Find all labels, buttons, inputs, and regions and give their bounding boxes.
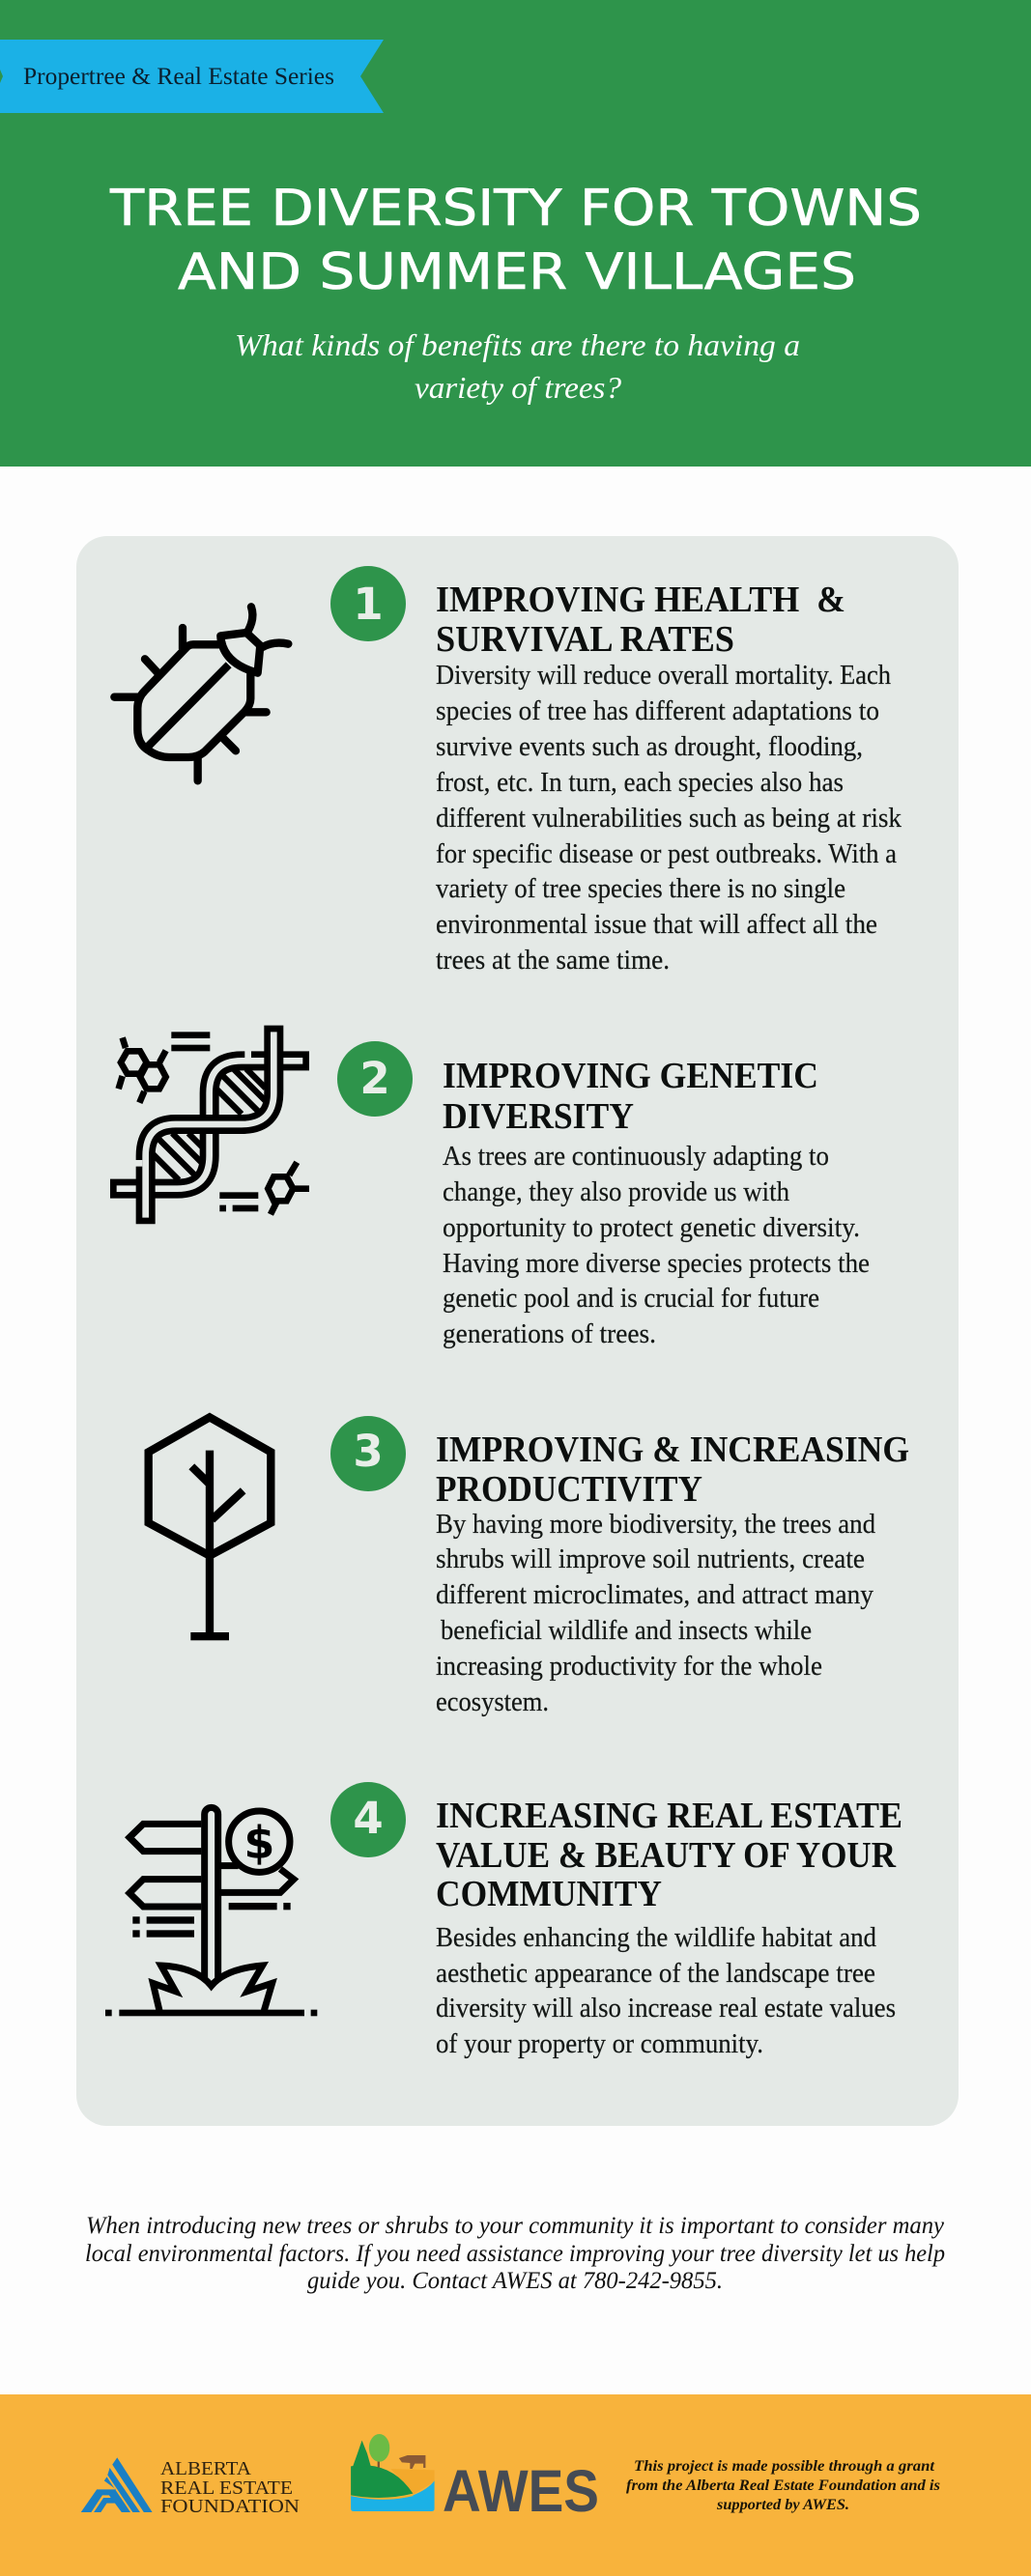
text block 2 bbox=[443, 1142, 870, 1349]
subtitle bbox=[235, 327, 800, 405]
closing note: When introducing new trees or shrubs to your community it is important to consider many bbox=[86, 2213, 945, 2239]
heading 1 bbox=[436, 580, 845, 660]
text block 4: diversity will also increase real estate values bbox=[436, 1994, 896, 2024]
sponsor note: supported by AWES. bbox=[716, 2497, 849, 2513]
closing note bbox=[85, 2213, 945, 2294]
subtitle: What kinds of benefits are there to having a bbox=[235, 327, 800, 362]
ribbon: series label: Propertree & Real Estate Series bbox=[23, 64, 334, 90]
text block 4: Besides enhancing the wildlife habitat and bbox=[436, 1923, 876, 1953]
closing note: local environmental factors. If you need assistance improving your tree diversity let us help bbox=[85, 2241, 945, 2267]
text block 1: environmental issue that will affect all the bbox=[436, 910, 877, 940]
icon: foundation mark bbox=[81, 2457, 153, 2512]
icon: dna bbox=[110, 1026, 309, 1224]
heading 4: COMMUNITY bbox=[436, 1874, 662, 1914]
number badge 4: 4 bbox=[353, 1793, 384, 1844]
item 2: improving genetic diversity bbox=[110, 1026, 870, 1349]
text block 4: aesthetic appearance of the landscape tree bbox=[436, 1959, 875, 1989]
footer band bbox=[0, 2394, 1031, 2576]
text block 3: increasing productivity for the whole bbox=[436, 1652, 822, 1682]
text block 1: different vulnerabilities such as being at risk bbox=[436, 804, 902, 834]
text block 1: for specific disease or pest outbreaks. With a bbox=[436, 839, 898, 869]
heading 1: IMPROVING HEALTH & bbox=[436, 580, 845, 620]
icon: beetle bbox=[114, 607, 288, 780]
text block 2: generations of trees. bbox=[443, 1319, 656, 1349]
number badge 3: 3 bbox=[353, 1426, 384, 1477]
text block 3: ecosystem. bbox=[436, 1687, 549, 1717]
title bbox=[109, 180, 922, 301]
text block 2: opportunity to protect genetic diversity. bbox=[443, 1213, 860, 1243]
number badge 2 bbox=[337, 1041, 413, 1117]
heading 4: VALUE & BEAUTY OF YOUR bbox=[436, 1835, 897, 1876]
icon: hexagon tree bbox=[149, 1417, 271, 1640]
subtitle: variety of trees? bbox=[415, 370, 621, 405]
AWES wordmark: AWES bbox=[443, 2458, 599, 2524]
text block 2: genetic pool and is crucial for future bbox=[443, 1284, 819, 1314]
sponsor note: from the Alberta Real Estate Foundation and is bbox=[626, 2477, 940, 2494]
sponsor note: This project is made possible through a grant bbox=[634, 2458, 935, 2475]
foundation wordmark: FOUNDATION bbox=[160, 2496, 300, 2517]
sponsor note bbox=[626, 2458, 940, 2513]
icon: AWES landscape bbox=[351, 2434, 435, 2511]
number badge 1: 1 bbox=[353, 579, 384, 630]
item 4: increasing real estate value bbox=[105, 1782, 902, 2059]
text block 3: different microclimates, and attract many bbox=[436, 1580, 873, 1610]
text block 4: of your property or community. bbox=[436, 2029, 763, 2059]
foundation wordmark bbox=[160, 2458, 300, 2517]
text block 3 bbox=[436, 1510, 875, 1717]
foundation wordmark: REAL ESTATE bbox=[160, 2477, 293, 2499]
number badge 4 bbox=[330, 1782, 406, 1857]
closing note: guide you. Contact AWES at 780-242-9855. bbox=[307, 2268, 723, 2294]
item 3: improving productivity bbox=[149, 1416, 909, 1717]
text block 3: beneficial wildlife and insects while bbox=[441, 1616, 812, 1646]
number badge 1 bbox=[330, 566, 406, 641]
icon: signpost with dollar bbox=[105, 1807, 317, 2016]
text block 4 bbox=[436, 1923, 896, 2059]
heading 4 bbox=[436, 1796, 902, 1914]
title: AND SUMMER VILLAGES bbox=[178, 243, 856, 301]
text block 1: Diversity will reduce overall mortality. Each bbox=[436, 661, 891, 691]
heading 2: IMPROVING GENETIC bbox=[443, 1056, 818, 1096]
foundation wordmark: ALBERTA bbox=[160, 2458, 252, 2479]
number badge 3 bbox=[330, 1416, 406, 1491]
text block 1: survive events such as drought, flooding, bbox=[436, 732, 863, 762]
item 1: improving health bbox=[114, 566, 902, 976]
icon: signpost with dollar: $ bbox=[243, 1817, 274, 1869]
heading 4: INCREASING REAL ESTATE bbox=[436, 1796, 902, 1836]
title: TREE DIVERSITY FOR TOWNS bbox=[109, 180, 922, 238]
logo: AWES bbox=[351, 2434, 599, 2524]
text block 1: frost, etc. In turn, each species also has bbox=[436, 768, 844, 798]
text block 3: shrubs will improve soil nutrients, create bbox=[436, 1544, 865, 1574]
heading 2 bbox=[443, 1056, 818, 1137]
number badge 2: 2 bbox=[359, 1053, 390, 1104]
text block 1: variety of tree species there is no single bbox=[436, 874, 845, 904]
ribbon: series label bbox=[0, 40, 384, 113]
text block 3: By having more biodiversity, the trees and bbox=[436, 1510, 875, 1540]
text block 2: change, they also provide us with bbox=[443, 1177, 789, 1207]
panel: benefits bbox=[76, 536, 959, 2126]
heading 3: PRODUCTIVITY bbox=[436, 1469, 702, 1510]
header band bbox=[0, 0, 1031, 467]
heading 1: SURVIVAL RATES bbox=[436, 619, 734, 660]
logo: Alberta Real Estate Foundation bbox=[81, 2457, 300, 2517]
heading 2: DIVERSITY bbox=[443, 1096, 634, 1137]
heading 3 bbox=[436, 1430, 909, 1510]
text block 2: As trees are continuously adapting to bbox=[443, 1142, 829, 1172]
text block 1: trees at the same time. bbox=[436, 946, 670, 976]
heading 3: IMPROVING & INCREASING bbox=[436, 1430, 909, 1470]
text block 2: Having more diverse species protects the bbox=[443, 1249, 870, 1279]
text block 1 bbox=[436, 661, 902, 976]
text block 1: species of tree has different adaptations to bbox=[436, 696, 879, 726]
